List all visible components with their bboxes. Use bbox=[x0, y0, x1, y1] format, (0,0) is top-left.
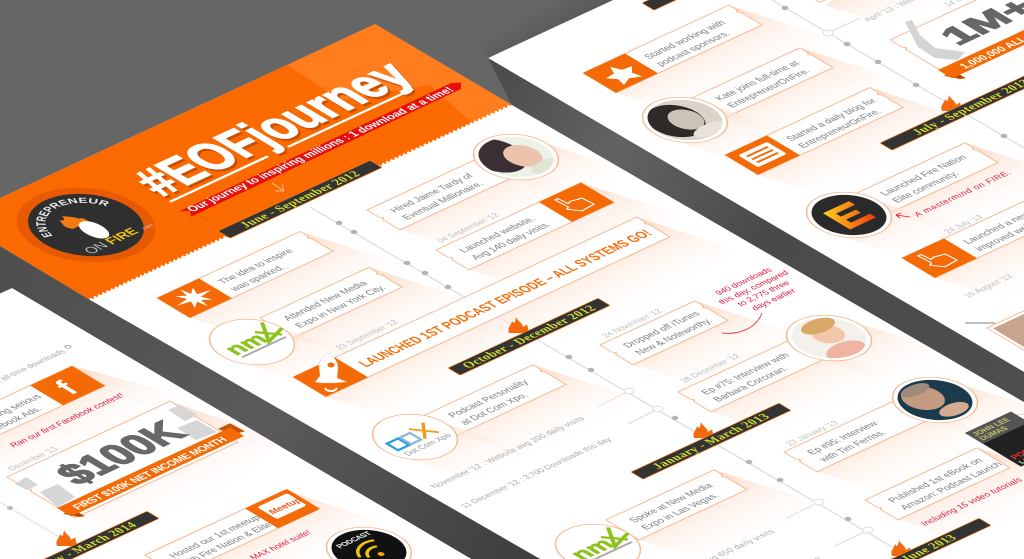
logo: Entrepreneur on Fire: ENTREPRENEUR bbox=[36, 198, 109, 238]
icon: facebook: f bbox=[47, 376, 87, 399]
callout stub at top bbox=[806, 0, 986, 48]
logo: E badge bbox=[789, 174, 991, 284]
callout: Launched website: Avg 140 daily visits. bbox=[469, 221, 554, 262]
date: 16 August 13: 16 August '13 bbox=[961, 273, 1015, 299]
book cover bbox=[965, 402, 1024, 471]
big number $100K: $100K bbox=[45, 415, 196, 491]
callout: podcast sponsors: Started working with bbox=[642, 19, 729, 61]
callout: dropped off iTunes bbox=[600, 288, 832, 411]
callout: published eBook bbox=[865, 435, 1024, 559]
big number 1M: 1M+ bbox=[932, 0, 1024, 50]
callout: Tim Ferriss bbox=[784, 389, 1024, 518]
callout: Barbara Corcoran: Barbara Corcoran. bbox=[711, 365, 791, 404]
title shadow and title: #EOFjourney bbox=[121, 55, 429, 205]
logo: Dot Com Xpo: Dot.Com Xpo bbox=[401, 431, 454, 457]
callout: daily blog: Started a daily blog for bbox=[784, 97, 880, 143]
date: 04 September 12: 04 September '12 bbox=[434, 211, 502, 244]
gap between panels (upper) bbox=[488, 58, 1024, 402]
subtitle ribbon: Our journey to inspiring millions : 1 download at a time! bbox=[185, 86, 457, 214]
callout: Fire Nation Elite bbox=[857, 130, 1024, 259]
callout: podcast sponsors: podcast sponsors. bbox=[654, 30, 733, 68]
logo: nmx: nm bbox=[217, 329, 273, 358]
red handwritten note: days earlier bbox=[748, 287, 799, 312]
callout: Launched website: Launched website. bbox=[457, 215, 538, 255]
date banner: January - March 2014 bbox=[44, 511, 159, 559]
date: 24 November 12: 24 November '12 bbox=[599, 307, 665, 339]
icon: cursor hand bbox=[539, 183, 614, 222]
book cover: DUMAS bbox=[977, 425, 1010, 442]
callout: first meetup: Hosted our 1st meetup bbox=[167, 514, 264, 559]
icon: cursor hand bbox=[902, 238, 977, 278]
laurel marks bbox=[15, 405, 217, 507]
callout: daily blog bbox=[725, 75, 1007, 221]
callout: Facebook ads bbox=[0, 366, 158, 462]
red handwritten note bbox=[706, 263, 812, 318]
icon: flame bbox=[508, 317, 529, 333]
red handwritten note: this day, compared bbox=[716, 269, 792, 306]
date banner: April - June 2013 bbox=[829, 518, 991, 559]
callout: Tim Ferriss: Ep #95: Interview bbox=[805, 419, 882, 457]
timeline bbox=[0, 502, 59, 537]
date: 23 September 12: 23 September '12 bbox=[333, 318, 401, 351]
milestone: all-time downloads bbox=[0, 344, 72, 383]
date banner: June - September 2012 bbox=[218, 160, 382, 238]
callout: New Media Expo NYC: Attended New Media bbox=[281, 279, 371, 323]
arrow: down to timeline bbox=[272, 183, 284, 191]
callout: Barbara Corcoran: Ep #75: Interview with bbox=[699, 352, 793, 397]
callout: New Media Expo Las Vegas: Spoke at New Media bbox=[627, 482, 716, 525]
date banner: January - March 2013: January - March 2013 bbox=[649, 411, 773, 471]
photo callout bbox=[987, 291, 1024, 352]
arrow: red curve bbox=[722, 313, 762, 333]
callout: daily blog: EntrepreneurOnFire. bbox=[796, 108, 884, 150]
ribbon: first $100K: FIRST $100K NET INCOME MONTH bbox=[70, 435, 231, 512]
gap between panels (lower) bbox=[0, 246, 540, 559]
red note: facebook contest: Ran our first Facebook contest! bbox=[7, 392, 127, 449]
callout: idea sparked: was sparked. bbox=[227, 264, 288, 294]
date banner: October - December 2012: October - December 2012 bbox=[458, 303, 599, 370]
date: December 13: December '13 bbox=[5, 445, 60, 472]
title shadow and title bbox=[136, 63, 416, 202]
callout: Fire Nation Elite: Launched Fire Nation bbox=[878, 154, 970, 198]
icon: flame bbox=[891, 540, 912, 556]
callout: Kate joins bbox=[692, 35, 937, 164]
photo: Barbara Corcoran bbox=[769, 294, 979, 409]
logo: Entrepreneur on Fire bbox=[16, 188, 156, 262]
callout: Hired Jaime Tardy: Eventual Millionaire. bbox=[400, 180, 487, 222]
timeline spine bbox=[772, 0, 1024, 148]
date banner: top cut-off bbox=[642, 0, 764, 10]
icon: spark bbox=[157, 278, 232, 318]
photo: Jaime Tardy bbox=[472, 134, 626, 182]
date banner: July - September 2013 bbox=[880, 64, 1024, 150]
icon: facebook bbox=[30, 366, 105, 405]
shadow above right panel bbox=[478, 0, 613, 58]
callout: Hired Jaime Tardy bbox=[366, 160, 543, 240]
date: November website visits: November '12 : Website avg 200 daily visits bbox=[428, 415, 587, 490]
circle: podcast badge bbox=[326, 526, 412, 559]
logo: Dot Com Xpo bbox=[355, 396, 557, 506]
callout: New Media Expo Las Vegas: Expo in Las Vegas. bbox=[639, 492, 722, 532]
logo: Entrepreneur on Fire: ON bbox=[80, 240, 112, 256]
title shadow and title: #EOFjourney bbox=[119, 53, 427, 203]
callout: $100K net income month bbox=[6, 400, 278, 520]
callout: Launched website bbox=[435, 182, 660, 280]
callout: improved website bbox=[902, 178, 1024, 324]
red note: mastermind: A mastermind on FIRE. bbox=[910, 169, 1014, 218]
timeline spine bbox=[310, 207, 930, 559]
header band bbox=[0, 24, 512, 300]
callout: idea sparked bbox=[156, 231, 380, 326]
ribbon: 1,000,000 all-time bbox=[936, 0, 1024, 83]
photo: Kate bbox=[625, 79, 827, 189]
callout: dropped off iTunes: New & Noteworthy. bbox=[633, 317, 716, 357]
callout: Hired Jaime Tardy: Hired Jaime Tardy of bbox=[388, 172, 477, 215]
logo: nmx bbox=[538, 515, 658, 559]
red note: video tutorials: Including 15 video tutorials bbox=[918, 476, 1024, 527]
icon: rocket bbox=[315, 353, 347, 391]
logo: Entrepreneur on Fire: FIRE bbox=[101, 226, 142, 246]
callout: 1M downloads bbox=[890, 0, 1024, 106]
date: 24 July 13: 24 July '13 bbox=[941, 213, 986, 235]
callout: Dot Com Xpo: Podcast Personality bbox=[446, 378, 532, 420]
date banner: January - March 2013 bbox=[631, 403, 791, 479]
callout: first meetup bbox=[144, 489, 362, 559]
callout: New Media Expo NYC bbox=[259, 266, 448, 346]
date: December downloads: 11 December '12 : 3,700 Downloads this day bbox=[458, 435, 614, 509]
callout: Kate joins: Kate joins full-time at bbox=[713, 60, 803, 103]
callout: launched 1st podcast: LAUNCHED 1ST PODCAST EPISODE – ALL SYSTEMS GO! bbox=[355, 228, 657, 370]
icon: flame bbox=[56, 530, 77, 546]
callout: podcast sponsors bbox=[583, 0, 865, 139]
callout: published eBook: Published 1st eBook on bbox=[886, 457, 986, 505]
logo: nmx bbox=[208, 318, 330, 374]
callout: Dot Com Xpo bbox=[424, 364, 624, 442]
callout: published eBook: Amazon: Podcast Launch bbox=[898, 460, 1006, 512]
callout: Dot Com Xpo: at Dot Com Xpo. bbox=[458, 391, 531, 427]
date: 23 January 13: 23 January '13 bbox=[783, 419, 841, 447]
icon: blog speech bubble bbox=[725, 135, 800, 175]
panel: right infographic sheet bbox=[488, 0, 1024, 372]
icon: star bbox=[583, 53, 658, 93]
callout: New Media Expo Las Vegas bbox=[606, 457, 852, 559]
logo: Entrepreneur on Fire: .com bbox=[139, 223, 156, 232]
callout: idea sparked: The idea to inspire bbox=[216, 247, 296, 286]
icon: meetup bbox=[245, 489, 320, 528]
callout: Fire Nation Elite: Elite community. bbox=[890, 170, 962, 205]
arrow: red bbox=[896, 213, 910, 218]
callout: Tim Ferriss: with Tim Ferriss. bbox=[816, 429, 889, 464]
callout: Barbara Corcoran bbox=[678, 327, 928, 458]
callout: Kate joins: EntrepreneurOnFire. bbox=[725, 67, 813, 110]
red handwritten note: 940 downloads bbox=[712, 266, 775, 297]
icon: meetup: Meetup bbox=[266, 497, 305, 516]
icon: flame bbox=[941, 95, 962, 111]
date: 18 December 12: 18 December '12 bbox=[677, 352, 743, 384]
ribbon: first $100K bbox=[57, 423, 245, 517]
photo: Tim Ferriss bbox=[875, 356, 1024, 471]
circle: podcast badge: PODCAST bbox=[334, 530, 374, 550]
panel: left infographic sheet bbox=[0, 288, 480, 559]
callout: New Media Expo NYC: Expo in New York City. bbox=[293, 284, 389, 330]
pointer line bbox=[965, 322, 995, 324]
book cover: JOHN LEE bbox=[970, 416, 1013, 437]
red handwritten note: to 2,775 three bbox=[734, 279, 792, 307]
icon: flame bbox=[693, 422, 714, 438]
callout: dropped off iTunes: Dropped off iTunes bbox=[621, 310, 703, 350]
callout: launched 1st podcast bbox=[292, 216, 716, 408]
date banner: June - September 2012: June - September 2012 bbox=[236, 169, 364, 230]
laurel bbox=[905, 20, 965, 60]
